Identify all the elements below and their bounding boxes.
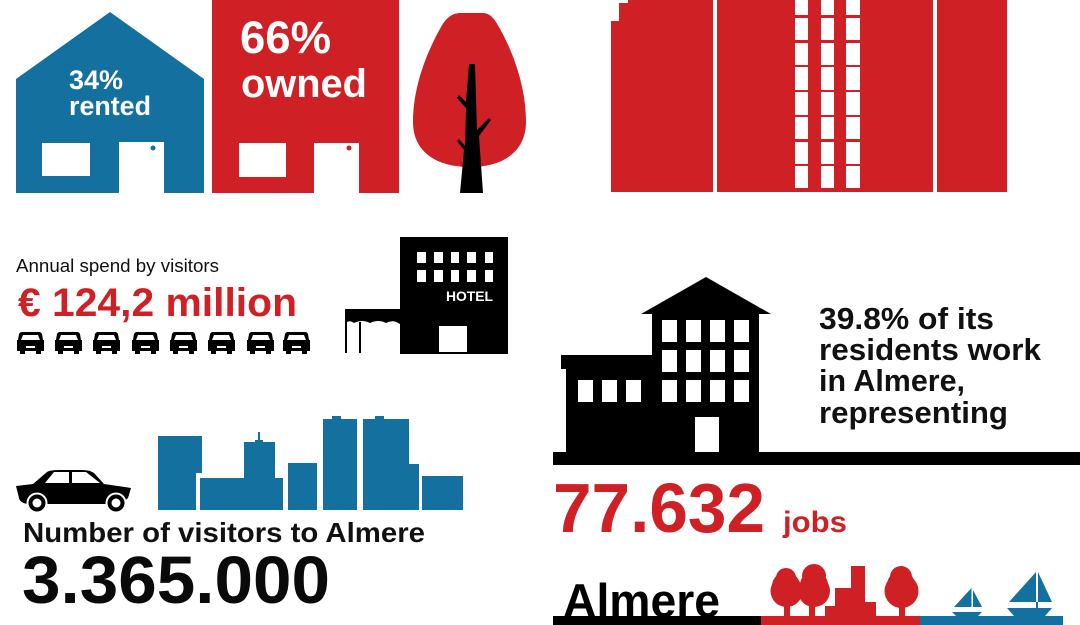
residents text: in Almere, (819, 363, 965, 398)
red house: 66% owned: 66% (240, 12, 331, 63)
jobs label: jobs (782, 506, 847, 539)
row of car icons (17, 332, 310, 354)
jobs number: 77.632 (553, 469, 765, 547)
annual spend label: Annual spend by visitors (16, 256, 219, 276)
visitors label: Number of visitors to Almere (23, 517, 425, 548)
hotel icon: HOTEL (446, 289, 493, 304)
black car icon (16, 470, 131, 512)
visitors number: 3.365.000 (22, 543, 330, 618)
red apartment block (611, 0, 1007, 192)
red trees and building (770, 564, 918, 616)
red house: 66% owned (212, 0, 399, 193)
blue skyline (158, 416, 463, 510)
blue house: 34% rented: 34% (69, 65, 123, 95)
residents text: 39.8% of its (819, 301, 994, 336)
tree (413, 13, 526, 193)
blue sailboats (952, 572, 1052, 616)
residents text: representing (819, 395, 1008, 430)
hotel icon (345, 237, 508, 354)
red house: 66% owned: owned (241, 62, 367, 106)
office building icon with ground line (553, 277, 1080, 465)
residents text: residents work (819, 332, 1042, 367)
blue house: 34% rented: rented (69, 91, 151, 121)
residents text (819, 301, 1042, 430)
blue house: 34% rented (16, 12, 204, 193)
tricolor ground bar (553, 616, 1063, 625)
annual spend value: € 124,2 million (18, 281, 297, 325)
